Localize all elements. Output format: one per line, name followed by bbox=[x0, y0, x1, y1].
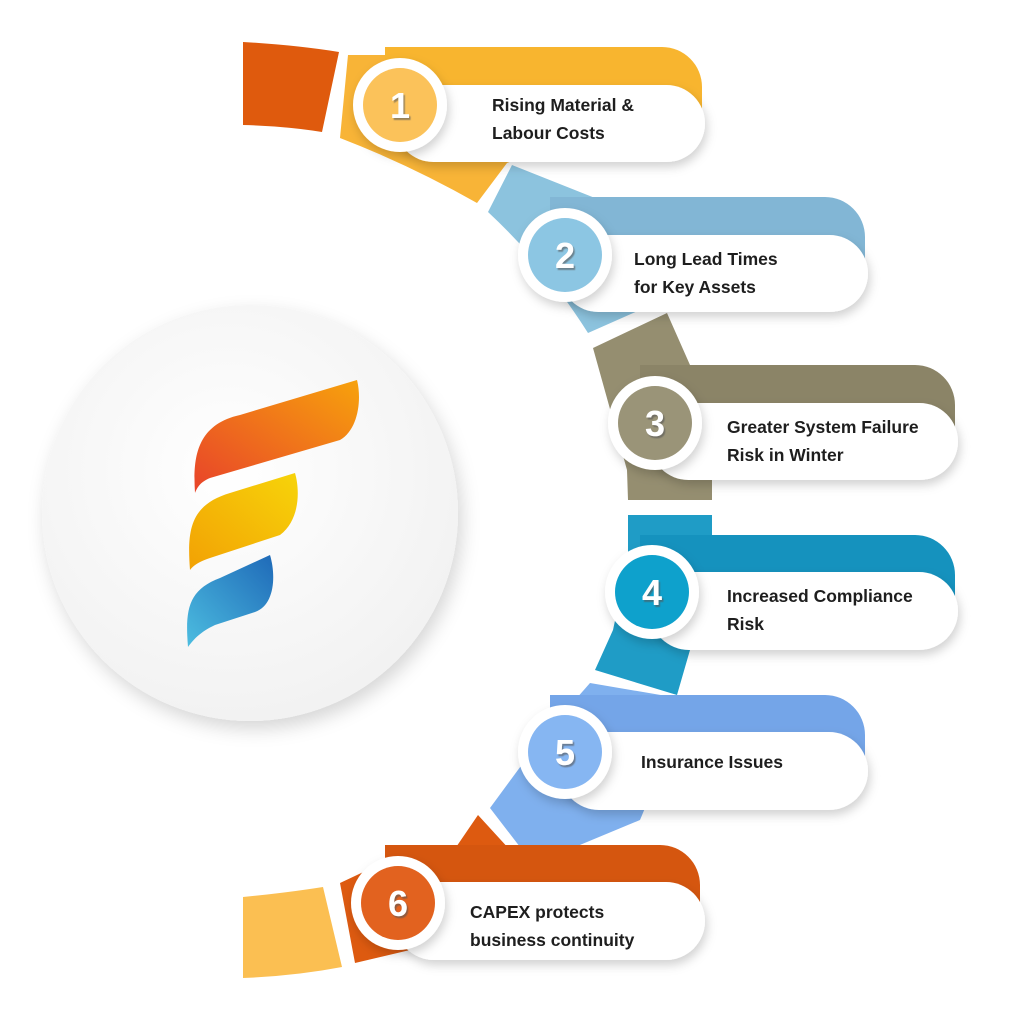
card 4 bbox=[605, 535, 958, 650]
card 1: Labour Costs bbox=[492, 123, 605, 143]
card 1 bbox=[353, 47, 705, 162]
card 4: Increased Compliance bbox=[727, 586, 913, 606]
card 2: 2 bbox=[555, 235, 575, 276]
card 5: 5 bbox=[555, 732, 575, 773]
card 2 bbox=[518, 197, 868, 312]
logo circle bbox=[42, 305, 458, 721]
card 2: Long Lead Times bbox=[634, 249, 778, 269]
card 4: 4 bbox=[642, 572, 662, 613]
card 6 bbox=[351, 845, 705, 960]
card 3: 3 bbox=[645, 403, 665, 444]
card 3: Risk in Winter bbox=[727, 445, 844, 465]
card 2: for Key Assets bbox=[634, 277, 756, 297]
ring: arc segments bbox=[243, 42, 712, 978]
logo: F mark bbox=[187, 380, 359, 647]
card 5 bbox=[518, 695, 868, 810]
card 5: Insurance Issues bbox=[641, 752, 783, 772]
card 6: 6 bbox=[388, 883, 408, 924]
card 4: Risk bbox=[727, 614, 764, 634]
card 3 bbox=[608, 365, 958, 480]
card 1: 1 bbox=[390, 85, 410, 126]
card 3: Greater System Failure bbox=[727, 417, 919, 437]
card 6: business continuity bbox=[470, 930, 635, 950]
card 1: Rising Material & bbox=[492, 95, 634, 115]
card 6: CAPEX protects bbox=[470, 902, 604, 922]
